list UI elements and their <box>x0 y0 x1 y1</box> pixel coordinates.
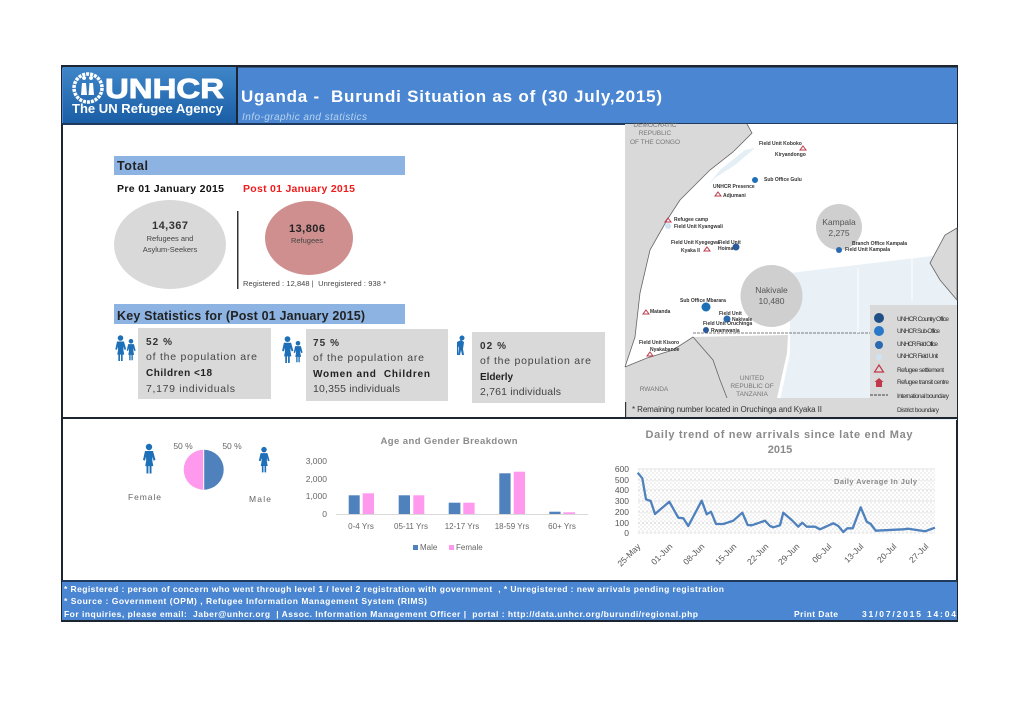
map: location markers and labels: Nyakabande <box>650 347 680 353</box>
y axis labels: 200 <box>615 507 629 517</box>
bubble: Kampala: 2,275 <box>828 228 850 238</box>
map: location markers and labels: Matanda <box>650 309 670 315</box>
stat card: children <box>138 328 271 399</box>
map: location markers and labels: Refugee camp <box>674 217 708 223</box>
map legend: UNHCR Country Office <box>897 316 949 323</box>
pie chart: gender split: 50 % <box>222 441 242 451</box>
stat card: elderly: of the population are <box>480 355 591 367</box>
map legend: Refugee transit centre <box>897 379 949 386</box>
date axis labels: 06-Jul <box>810 541 833 565</box>
title: Uganda - Burundi Situation as of (30 July,2015) <box>241 87 662 106</box>
map: location markers and labels: Field Unit <box>719 311 742 317</box>
y axis labels: 500 <box>615 475 629 485</box>
map: location markers and labels: Adjumani <box>723 193 746 199</box>
heading: Key Statistics <box>114 304 405 324</box>
heading: Total: Total <box>117 159 148 173</box>
legend <box>413 543 483 552</box>
y axis labels: 0 <box>322 509 327 519</box>
x axis labels: 12-17 Yrs <box>445 522 479 531</box>
map: international boundary <box>693 332 870 334</box>
x axis labels: 60+ Yrs <box>548 522 576 531</box>
date axis labels: 22-Jun <box>745 541 771 567</box>
map labels: neighbouring countries: UNITED <box>740 375 764 382</box>
stat card: children: Children <18 <box>146 368 212 379</box>
heading: Key Statistics: Key Statistics for (Post 01 January 2015) <box>117 309 365 323</box>
icon: female <box>143 444 156 474</box>
stat card: women and children: 75 % <box>313 338 339 349</box>
date axis labels: 25-May <box>615 541 643 568</box>
x axis labels <box>348 522 576 531</box>
map legend <box>870 305 957 417</box>
y axis labels: 400 <box>615 485 629 495</box>
map caption <box>625 398 870 417</box>
y axis labels <box>306 456 327 519</box>
map labels: neighbouring countries: RWANDA <box>640 386 669 393</box>
y axis labels: 600 <box>615 464 629 474</box>
y axis labels: 1,000 <box>306 491 327 501</box>
stat card: elderly: 2,761 individuals <box>480 386 561 398</box>
map legend: UNHCR Field Unit <box>897 353 938 360</box>
stat card: women and children: Women and Children <box>313 369 430 380</box>
date axis labels: 13-Jul <box>842 541 865 565</box>
label: Post 01 January 2015: Post 01 January 2015 <box>243 183 355 195</box>
date axis labels <box>615 541 930 568</box>
chart title: 2015 <box>768 444 792 456</box>
stat card: elderly <box>472 332 605 403</box>
chart title: Daily trend of new arrivals since late end May <box>646 429 913 441</box>
map: location markers and labels: Sub Office Gulu <box>764 177 802 183</box>
y axis labels: 2,000 <box>306 474 327 484</box>
bar chart: age and gender breakdown <box>306 436 588 552</box>
map labels: neighbouring countries: OF THE CONGO <box>630 139 680 146</box>
line chart: daily trend of new arrivals <box>615 429 935 568</box>
map: location markers and labels: Field Unit Koboko <box>759 141 802 147</box>
icon: wreath emblem <box>74 74 102 102</box>
map: lake grid lines <box>858 258 912 333</box>
map labels: neighbouring countries <box>630 122 774 398</box>
y axis labels: 300 <box>615 496 629 506</box>
UNHCR logo: The UN Refugee Agency <box>72 101 224 116</box>
map labels: neighbouring countries: DEMOCRATIC <box>633 122 677 129</box>
map: location markers and labels: Hoima <box>718 246 734 252</box>
icon: mother and child <box>115 335 136 361</box>
label: Female: Female <box>128 492 161 502</box>
date axis labels: 15-Jun <box>713 541 739 567</box>
footer: definitions: * Registered : person of concern who went through level 1 / level 2 registration with government , * Unregistered : new arrivals pending registration <box>64 584 724 594</box>
map: lake and water area <box>776 253 957 420</box>
map: DRC territory <box>625 124 752 367</box>
pie chart: gender split <box>173 441 242 490</box>
date axis labels: 29-Jun <box>776 541 802 567</box>
female bars <box>363 472 575 514</box>
map: location markers and labels: Field Unit Oruchinga <box>703 321 752 327</box>
footer: contact: For inquiries, please email: Jaber@unhcr.org | Assoc. Information Management Officer | portal : http://data.unhcr.org/burundi/regional.php <box>64 609 698 619</box>
map: Lake Albert <box>708 148 755 185</box>
x axis labels: 18-59 Yrs <box>495 522 529 531</box>
header band <box>62 66 957 125</box>
callout: daily average in July: Daily Average In July <box>834 477 918 486</box>
map <box>625 122 957 420</box>
x axis labels: 05-11 Yrs <box>394 522 428 531</box>
stat card: elderly: 02 % <box>480 341 506 352</box>
UNHCR logo: UNHCR <box>105 73 224 104</box>
map: location markers and labels: Kiryandongo <box>775 152 806 158</box>
bubble: pre-2015 total <box>114 200 226 289</box>
date axis labels: 27-Jul <box>907 541 930 565</box>
stat card: children: 7,179 individuals <box>146 383 235 395</box>
map legend: International boundary <box>897 393 950 400</box>
map: location markers and labels: UNHCR Presence <box>713 184 755 190</box>
pie chart: gender split: 50 % <box>173 441 193 451</box>
map: location markers and labels: Field Unit Kyegegwa <box>671 240 720 246</box>
y axis labels <box>615 464 629 538</box>
grid lines <box>638 469 935 533</box>
bubble: Kampala <box>816 204 862 250</box>
icon: male <box>259 447 270 472</box>
map legend: District boundary <box>897 407 940 414</box>
legend: Male <box>420 543 438 552</box>
trend line <box>638 473 935 532</box>
bubble: post-2015 total: 13,806 <box>289 223 325 235</box>
label: Pre 01 January 2015: Pre 01 January 2015 <box>117 183 224 195</box>
stat card: children: 52 % <box>146 337 172 348</box>
footer: source: * Source : Government (OPM) , Refugee Information Management System (RIMS) <box>64 596 427 606</box>
y axis labels: 3,000 <box>306 456 327 466</box>
stat card: women and children <box>306 329 448 401</box>
map labels: neighbouring countries: TANZANIA <box>736 391 768 398</box>
subtitle: Info-graphic and statistics <box>242 112 367 123</box>
map legend: UNHCR Sub-Office <box>897 328 940 335</box>
bubble: pre-2015 total: 14,367 <box>152 220 188 232</box>
map: location markers and labels: Rwamwanja <box>711 328 740 334</box>
map: location markers and labels: Field Unit Kampala <box>845 247 890 253</box>
bubble: post-2015 total <box>265 201 353 275</box>
map: location markers and labels: Nakivale <box>732 317 753 323</box>
chart title <box>646 429 913 456</box>
stat card: children: of the population are <box>146 351 257 363</box>
UNHCR logo <box>63 66 238 124</box>
map: DRC border <box>625 124 752 367</box>
y axis labels: 0 <box>624 528 629 538</box>
map: location markers and labels: Sub Office Mbarara <box>680 298 726 304</box>
map: location markers and labels <box>639 141 907 356</box>
footer band: 31/07/2015 14:04 <box>862 609 956 619</box>
date axis labels: 08-Jun <box>681 541 707 567</box>
x axis labels: 0-4 Yrs <box>348 522 374 531</box>
icon: elderly person <box>457 336 464 355</box>
map: location markers and labels: Field Unit <box>718 240 741 246</box>
bubble: post-2015 total: Refugees <box>291 236 323 245</box>
stat card: elderly: Elderly <box>480 372 513 383</box>
bubble: Nakivale: Nakivale <box>755 285 788 295</box>
footer band <box>62 580 957 622</box>
date axis labels: 01-Jun <box>649 541 675 567</box>
map labels: neighbouring countries: REPUBLIC OF <box>730 383 774 390</box>
date axis labels: 20-Jul <box>875 541 898 565</box>
registered note: Registered : 12,848 | Unregistered : 938 * <box>243 279 386 288</box>
label: Male: Male <box>249 494 271 504</box>
stat card: women and children: of the population are <box>313 352 424 364</box>
footer: print date: Print Date <box>794 609 838 619</box>
map legend: UNHCR Field Office <box>897 341 938 348</box>
y axis labels: 100 <box>615 518 629 528</box>
icon: women and children <box>282 336 303 363</box>
map: Rwanda and Tanzania territory <box>625 335 788 398</box>
map: location markers and labels: Kyaka II <box>681 248 701 254</box>
page frame <box>62 66 957 621</box>
divider between periods <box>237 211 238 289</box>
bubble: pre-2015 total: Refugees and <box>147 234 193 243</box>
daily average band <box>638 468 935 533</box>
map: location markers and labels: Branch Office Kampala <box>852 241 907 247</box>
map: location markers and labels: Field Unit Kyangwali <box>674 224 724 230</box>
heading: Total <box>114 156 405 175</box>
map: Lake Edward <box>625 279 640 300</box>
map: location markers and labels: Field Unit Kisoro <box>639 340 679 346</box>
divider: lower section <box>62 417 957 419</box>
map caption: * Remaining number located in Oruchinga and Kyaka II <box>632 405 822 414</box>
bubble: pre-2015 total: Asylum-Seekers <box>143 245 198 254</box>
bubble: Nakivale: 10,480 <box>758 296 785 306</box>
map legend: Refugee settlement <box>897 367 944 374</box>
map labels: neighbouring countries: REPUBLIC <box>639 130 672 137</box>
stat card: women and children: 10,355 individuals <box>313 383 400 395</box>
bubble: Kampala: Kampala <box>822 217 856 227</box>
legend: Female <box>456 543 483 552</box>
bubble: Nakivale <box>740 265 802 327</box>
male bars <box>349 473 561 514</box>
chart title: Age and Gender Breakdown <box>380 436 518 447</box>
map: Kenya territory <box>930 228 957 300</box>
